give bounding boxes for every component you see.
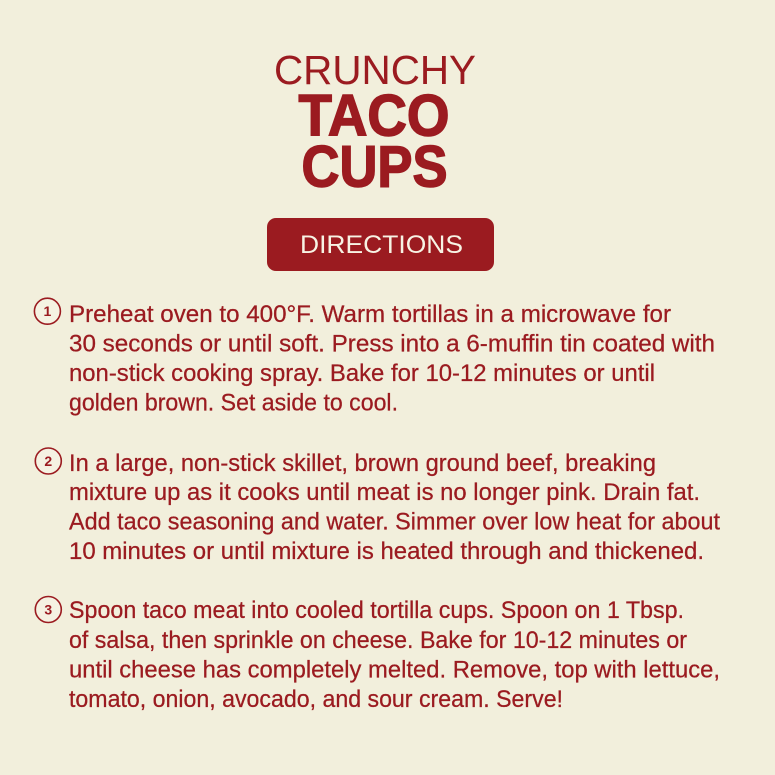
step 3 text: tomato, onion, avocado, and sour cream. Serve! (69, 686, 563, 713)
step 3 text: of salsa, then sprinkle on cheese. Bake for 10-12 minutes or (69, 627, 687, 654)
icon: number 2 badge (35, 448, 61, 474)
directions button (267, 218, 494, 271)
step 1 text: Preheat oven to 400°F. Warm tortillas in a microwave for (69, 301, 671, 328)
title (274, 47, 476, 200)
directions button: DIRECTIONS (300, 231, 463, 259)
step 2 text: Add taco seasoning and water. Simmer over low heat for about (69, 508, 720, 536)
step 3 (35, 596, 720, 713)
icon: number 3 badge: 3 (44, 602, 52, 618)
step 2 text: In a large, non-stick skillet, brown ground beef, breaking (69, 450, 656, 477)
step 1 text: non-stick cooking spray. Bake for 10-12 minutes or until (69, 360, 655, 387)
title line: cups: CUPS (302, 134, 448, 200)
icon: number 1 badge (34, 298, 60, 324)
step 3 text (69, 597, 720, 713)
step 2 text: mixture up as it cooks until meat is no longer pink. Drain fat. (69, 479, 700, 506)
icon: number 2 badge: 2 (44, 453, 52, 469)
step 1 (34, 298, 715, 416)
step 2 (35, 448, 720, 565)
icon: number 3 badge (35, 596, 61, 622)
step 2 text (69, 450, 720, 565)
step 3 text: Spoon taco meat into cooled tortilla cups. Spoon on 1 Tbsp. (69, 597, 684, 624)
step 1 text: 30 seconds or until soft. Press into a 6-muffin tin coated with (69, 330, 715, 358)
step 1 text: golden brown. Set aside to cool. (69, 390, 398, 416)
step 2 text: 10 minutes or until mixture is heated through and thickened. (69, 538, 704, 565)
icon: number 1 badge: 1 (44, 303, 52, 319)
step 3 text: until cheese has completely melted. Remove, top with lettuce, (69, 656, 720, 684)
title line: crunchy: CRUNCHY (274, 47, 476, 93)
title line: taco: TACO (298, 84, 450, 148)
step 1 text (69, 301, 715, 416)
